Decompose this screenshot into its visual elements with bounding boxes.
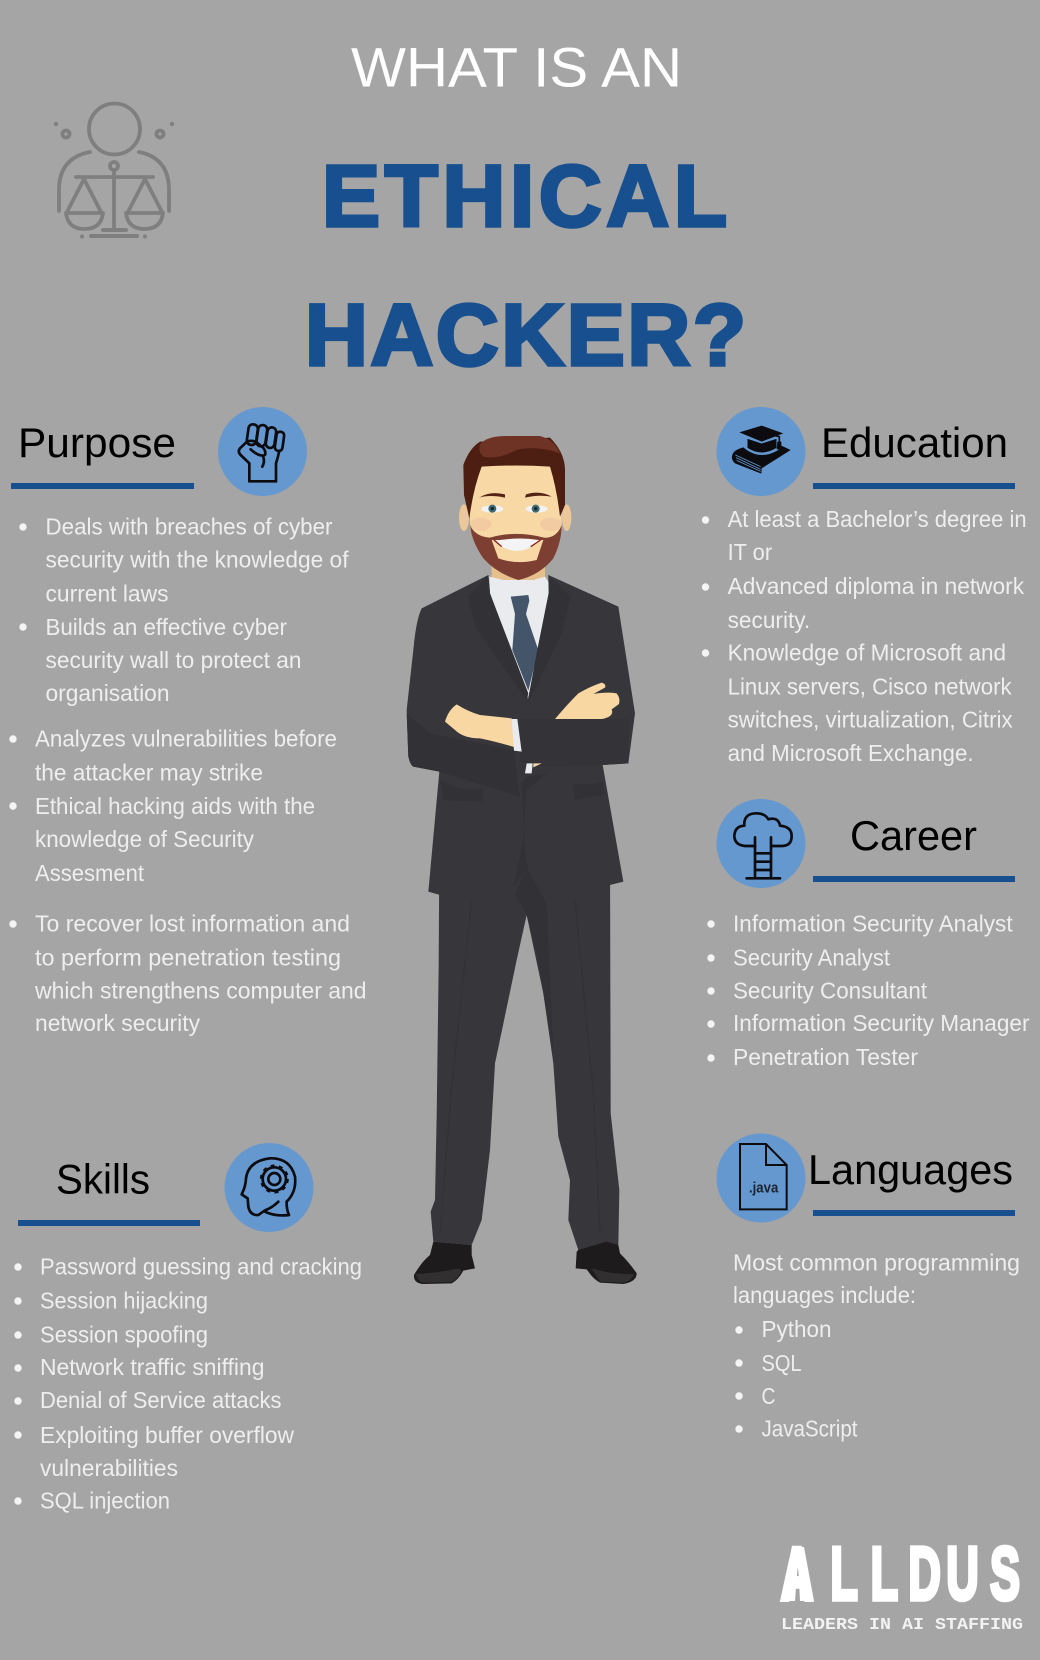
text block: career list: Information Security Manager	[733, 1010, 1030, 1036]
text block: education list: IT or	[728, 539, 772, 565]
text block: career list: Penetration Tester	[733, 1044, 918, 1070]
text block: career list: Security Consultant	[733, 977, 928, 1003]
icon: cloud with ladder	[716, 799, 806, 888]
logo: alldus	[781, 1533, 1023, 1635]
neck	[492, 560, 545, 600]
shoes	[414, 1242, 637, 1284]
text block: purpose list one: current laws	[46, 580, 168, 606]
text block: purpose list two: Ethical hacking aids with the	[35, 793, 315, 819]
text block: skills list: Session spoofing	[40, 1321, 208, 1347]
text block: languages list: languages include:	[733, 1282, 916, 1308]
crossed arms	[407, 683, 628, 797]
icon: java file: .java	[749, 1181, 779, 1197]
text block: education list	[702, 506, 1027, 766]
heading: purpose	[11, 419, 194, 489]
icon: person with scales of justice	[54, 104, 174, 238]
jacket	[407, 575, 635, 899]
title	[305, 36, 746, 384]
text block: languages list: SQL	[762, 1350, 802, 1376]
text block: education list: At least a Bachelor’s degree in	[728, 506, 1027, 532]
text block: purpose list one: Builds an effective cyber	[46, 614, 287, 640]
text block: career list: Security Analyst	[733, 944, 891, 970]
text block: career list: Information Security Analyst	[733, 911, 1013, 937]
text block: purpose list two: the attacker may strike	[35, 759, 263, 785]
icon: graduation cap on book	[716, 407, 806, 496]
text block: purpose list one: security wall to protect an	[46, 647, 302, 673]
heading: education	[813, 419, 1015, 489]
text block: purpose list one: security with the knowledge of	[46, 546, 349, 572]
text block: purpose list two: To recover lost information and	[35, 911, 350, 937]
text block: languages list: C	[762, 1383, 776, 1409]
illustration: man in suit with crossed arms	[407, 436, 637, 1284]
icon: java file	[716, 1134, 806, 1222]
heading: skills: Skills	[56, 1156, 150, 1202]
heading: career: Career	[850, 812, 977, 859]
lapels	[440, 575, 603, 893]
text block: education list: Linux servers, Cisco network	[728, 674, 1012, 700]
text block: skills list: SQL injection	[40, 1488, 170, 1514]
head	[459, 436, 571, 580]
text block: skills list	[14, 1254, 362, 1514]
heading: career	[813, 812, 1015, 882]
text block: education list: and Microsoft Exchange.	[728, 740, 974, 766]
text block: skills list: Password guessing and cracking	[40, 1254, 362, 1280]
heading: education: Education	[821, 419, 1008, 466]
heading: languages: Languages	[808, 1146, 1013, 1193]
text block: purpose list two: Analyzes vulnerabilities before	[35, 725, 337, 751]
logo wordmark: ALLDUS	[781, 1533, 1020, 1616]
heading: languages	[808, 1146, 1015, 1216]
text block: skills list: Network traffic sniffing	[40, 1354, 264, 1380]
text block: purpose list two: knowledge of Security	[35, 826, 254, 852]
title line: what is an: WHAT IS AN	[351, 36, 682, 98]
text block: skills list: Exploiting buffer overflow	[40, 1422, 294, 1448]
text block: skills list: vulnerabilities	[40, 1455, 178, 1481]
trousers	[431, 853, 619, 1250]
text block: purpose list two: which strengthens computer and	[34, 977, 366, 1003]
text block: education list: Advanced diploma in network	[728, 573, 1025, 599]
title line: hacker: HACKER?	[305, 287, 746, 384]
shirt and tie	[489, 577, 549, 697]
text block: career list	[707, 911, 1030, 1070]
logo tagline: LEADERS IN AI STAFFING	[781, 1616, 1023, 1635]
title line: ethical: ETHICAL	[322, 148, 727, 245]
text block: purpose list one: Deals with breaches of cyber	[46, 514, 333, 540]
heading: purpose: Purpose	[18, 419, 176, 466]
text block: purpose list two	[9, 725, 367, 1036]
text block: purpose list two: network security	[35, 1010, 200, 1036]
text block: purpose list one: organisation	[46, 680, 170, 706]
text block: education list: security.	[728, 607, 810, 633]
text block: languages list	[733, 1249, 1020, 1442]
text block: education list: switches, virtualization, Citrix	[728, 706, 1013, 732]
icon: raised fist	[218, 407, 307, 496]
logo wordmark letter A opening	[782, 1547, 814, 1601]
text block: languages list: Most common programming	[733, 1249, 1020, 1275]
text block: purpose list one	[19, 514, 349, 706]
text block: skills list: Session hijacking	[40, 1288, 208, 1314]
text block: languages list: JavaScript	[762, 1416, 858, 1442]
text block: languages list: Python	[762, 1316, 832, 1342]
text block: purpose list two: Assesment	[35, 860, 145, 886]
text block: education list: Knowledge of Microsoft and	[728, 640, 1006, 666]
text block: purpose list two: to perform penetration testing	[35, 944, 341, 970]
heading: skills	[18, 1156, 200, 1226]
icon: head with gear	[224, 1143, 314, 1232]
text block: skills list: Denial of Service attacks	[40, 1387, 282, 1413]
